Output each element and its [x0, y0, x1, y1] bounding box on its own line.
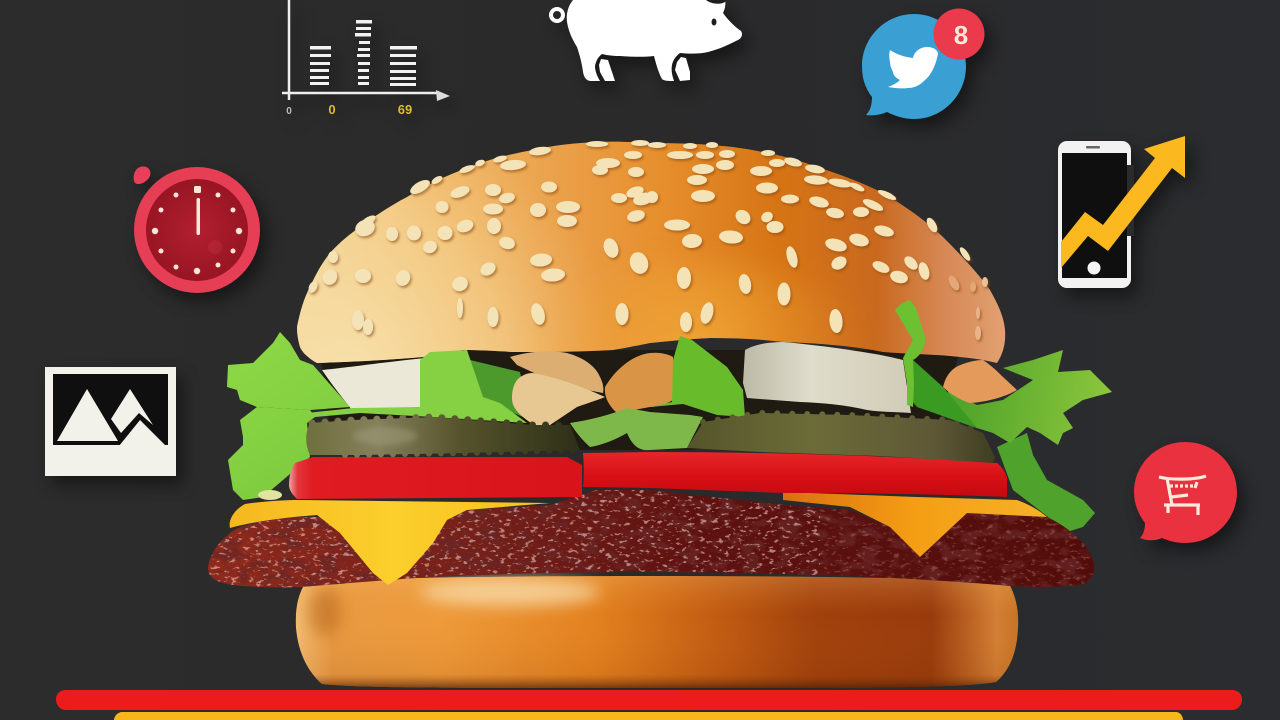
sesame seeds — [307, 140, 988, 340]
lettuce: left leaves — [227, 332, 527, 500]
cheese right — [783, 492, 1047, 557]
dark gap under bun — [320, 350, 960, 450]
icon: image picture frame — [45, 367, 176, 476]
bird glyph — [888, 47, 938, 88]
pickle right — [687, 413, 995, 463]
yellow base stripe — [114, 712, 1183, 720]
onion right — [743, 342, 911, 413]
peanut ingredients — [510, 351, 673, 427]
icon: bar chart: 0 — [328, 102, 336, 117]
lettuce: centre-right ribbon and leaf — [895, 300, 977, 428]
icon: shopping cart bubble — [1134, 442, 1237, 543]
icon: bar chart — [282, 0, 450, 117]
red base stripe — [56, 690, 1242, 710]
icon: twitter badge — [862, 8, 984, 119]
icon: bar chart: 69 — [398, 102, 412, 117]
tomato right — [583, 452, 1007, 497]
icon: phone with rising arrow — [1058, 136, 1185, 288]
lettuce: far right frill and lower leaf — [917, 350, 1112, 532]
darker lettuce behind peanuts — [470, 360, 530, 420]
peach blob right of the onion — [943, 360, 1017, 403]
onion left — [322, 358, 426, 410]
icon: stopwatch clock — [134, 166, 260, 293]
icon: bar chart: 0 — [286, 106, 292, 117]
bottom bun — [296, 576, 1018, 688]
top bun — [297, 140, 1006, 363]
tomato left — [289, 457, 582, 499]
lettuce: pickle-side leaves — [570, 336, 745, 450]
pickle left — [306, 417, 580, 455]
notification badge: 8 — [954, 20, 968, 50]
icon: piggy bank — [551, 0, 742, 81]
burger illustration — [56, 130, 1242, 720]
patty — [200, 485, 1100, 590]
cheese left — [230, 500, 550, 585]
